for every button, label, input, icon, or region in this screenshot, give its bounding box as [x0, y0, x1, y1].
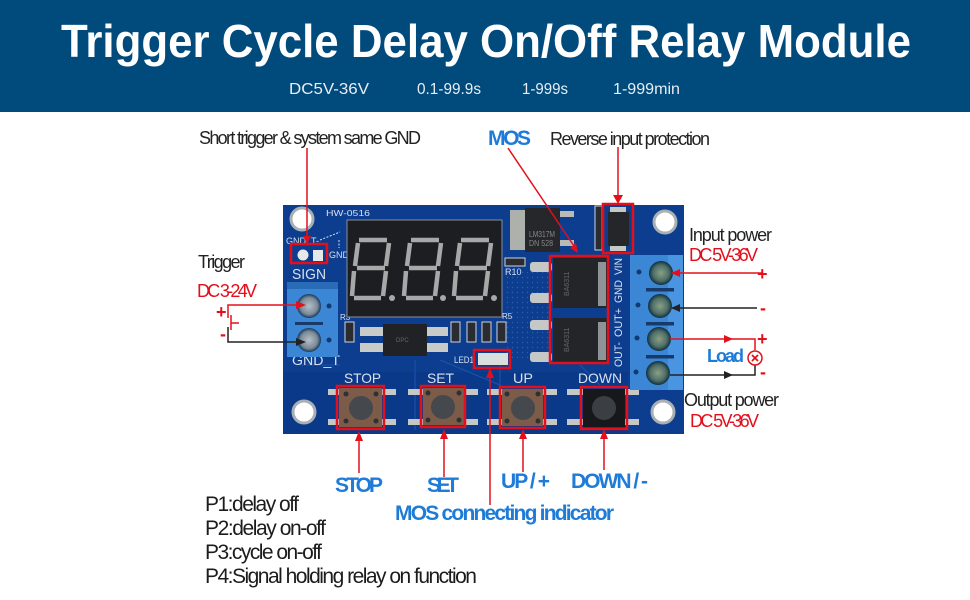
board silkscreen labels: STOP: [344, 370, 381, 386]
MOSFET chips: [530, 258, 607, 362]
tact buttons: [328, 388, 639, 427]
label: trigger: Trigger: [198, 252, 245, 272]
mode P2: P2:delay on-off: [205, 517, 326, 540]
label: input power: Input power: [689, 225, 772, 245]
label: load: Load: [707, 346, 744, 366]
board silkscreen labels: SET: [427, 370, 454, 386]
board silkscreen labels: R5: [502, 312, 513, 321]
load plus sign: +: [757, 329, 768, 349]
spec: range 1-999min: 1-999min: [613, 81, 680, 98]
left terminal block: [287, 282, 338, 357]
spec: range 0.1-99.9s: 0.1-99.9s: [417, 81, 481, 98]
board silkscreen labels: OUT-: [613, 342, 625, 367]
board silkscreen labels: DOWN: [578, 370, 622, 386]
label: MOS connecting indicator: MOS connecting indicator: [395, 502, 614, 525]
trigger minus sign: -: [220, 324, 226, 344]
mounting holes: [291, 208, 676, 423]
label: UP/+: UP / +: [501, 470, 550, 493]
spec: range 1-999s: 1-999s: [522, 81, 568, 98]
board silkscreen labels: SIGN: [292, 266, 326, 283]
LED: [478, 353, 508, 365]
right terminal block: [630, 255, 683, 390]
trigger plus sign: +: [216, 302, 227, 322]
label: short trigger: Short trigger & system same GND: [199, 128, 421, 148]
mode P4: P4:Signal holding relay on function: [205, 565, 477, 588]
label: output voltage: DC 5V-36V: [690, 411, 759, 431]
load minus sign: -: [760, 362, 766, 382]
spec: voltage: DC5V-36V: [289, 81, 369, 98]
board silkscreen labels: GND: [613, 280, 625, 303]
board silkscreen labels: VIN: [613, 258, 625, 275]
label: MOS: MOS: [488, 127, 531, 150]
label: SET: SET: [427, 474, 459, 497]
board silkscreen labels: T-: [311, 236, 319, 246]
board silkscreen labels: [286, 208, 625, 386]
board silkscreen labels: GND: [286, 236, 306, 246]
load symbol: [748, 351, 762, 365]
board silkscreen labels: OUT+: [613, 308, 625, 337]
resistors: [345, 206, 602, 342]
label: input voltage: DC 5V-36V: [689, 245, 758, 265]
board silkscreen labels: LED1: [454, 355, 474, 365]
red highlight boxes: [291, 204, 633, 429]
board silkscreen labels: GND: [329, 250, 350, 260]
MOSFET chips: BA6311: [564, 328, 571, 352]
label: DOWN/-: DOWN / -: [571, 470, 648, 493]
optocoupler: DPC: [396, 338, 409, 344]
board silkscreen labels: HW-0516: [326, 208, 370, 218]
label: STOP: STOP: [335, 474, 383, 497]
diode SS34: [608, 207, 629, 251]
seven-segment display: [347, 220, 502, 317]
callout arrows: [228, 147, 762, 505]
trigger pads: [298, 250, 323, 261]
title: Trigger Cycle Delay On/Off Relay Module: [61, 15, 911, 67]
header banner: [0, 0, 970, 112]
label: output power: Output power: [684, 390, 779, 410]
LM317 regulator: [510, 208, 574, 252]
board silkscreen labels: GND_T: [292, 352, 340, 368]
input plus sign: +: [757, 264, 768, 284]
LM317 regulator: DN 528: [529, 239, 553, 248]
relay module board: [283, 204, 684, 434]
mode list: [205, 493, 477, 588]
MOSFET chips: BA6311: [564, 272, 571, 296]
label: reverse input protection: Reverse input protection: [550, 129, 710, 149]
optocoupler: [360, 324, 448, 356]
board silkscreen labels: UP: [513, 370, 533, 386]
board silkscreen labels: R10: [505, 267, 522, 277]
mode P1: P1:delay off: [205, 493, 299, 516]
LM317 regulator: LM317M: [529, 230, 555, 239]
input minus sign: -: [760, 298, 766, 318]
board silkscreen labels: R3: [340, 313, 351, 322]
label: DC 3-24V: DC 3-24V: [197, 281, 257, 301]
mode P3: P3:cycle on-off: [205, 541, 322, 564]
